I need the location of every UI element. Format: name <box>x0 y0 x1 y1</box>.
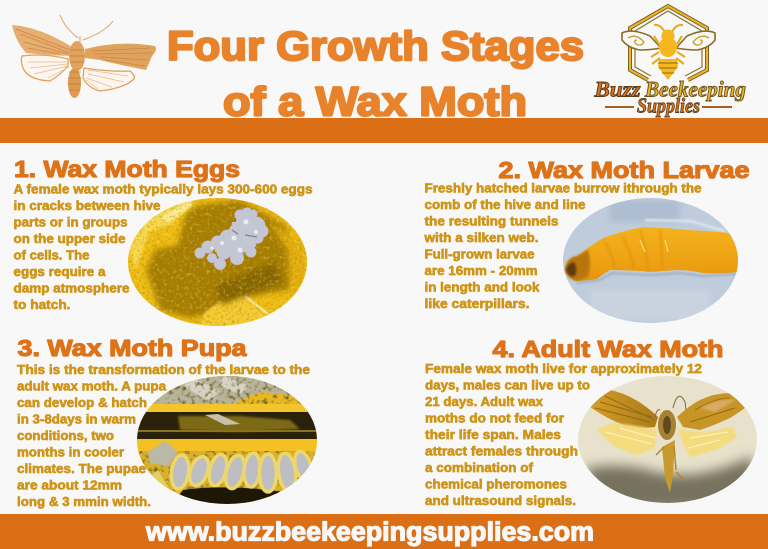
icon: sketched moth <box>12 15 156 98</box>
text block: of cells. The <box>14 248 90 262</box>
text block: on the upper side <box>14 232 126 246</box>
logo wordmark: Buzz <box>593 76 641 102</box>
photo: eggs on comb <box>128 198 308 330</box>
text block: adult wax moth. A pupa <box>17 380 167 394</box>
logo wordmark: Supplies <box>637 94 700 118</box>
icon: bee <box>622 25 715 80</box>
text block: in length and look <box>424 280 540 294</box>
text block: with a silken web. <box>423 231 538 245</box>
text block: chemical pheromones <box>425 478 567 492</box>
text block: 21 days. Adult wax <box>425 395 543 409</box>
text block: in cracks between hive <box>14 199 161 213</box>
text block: attract females through <box>425 444 578 458</box>
text block: their life span. Males <box>425 428 561 442</box>
text block: climates. The pupae <box>17 462 146 476</box>
text block <box>17 363 310 509</box>
photo: adult moth <box>578 376 758 510</box>
title: of a Wax Moth <box>223 78 527 124</box>
text block: the resulting tunnels <box>424 214 559 228</box>
text block: days, males can live up to <box>425 378 590 392</box>
heading: 2. Wax Moth Larvae <box>498 157 750 183</box>
title <box>167 23 584 124</box>
top band <box>0 118 768 143</box>
text block: like caterpillars. <box>424 297 530 311</box>
panel: 3. wax moth pupa <box>17 335 317 509</box>
title: Four Growth Stages <box>167 23 584 69</box>
pupae cells <box>169 450 314 492</box>
text block: Female wax moth live for approximately 12 <box>425 362 702 376</box>
heading: 1. Wax Moth Eggs <box>14 156 240 182</box>
text block: A female wax moth typically lays 300-600 eggs <box>14 182 313 196</box>
text block: in 3-8days in warm <box>17 412 136 426</box>
text block: This is the transformation of the larvae to the <box>17 363 310 377</box>
text block <box>423 182 702 311</box>
text block: are 16mm - 20mm <box>424 264 538 278</box>
eggs cluster <box>195 208 268 270</box>
text block: Freshly hatched larvae burrow ithrough the <box>424 182 702 196</box>
text block: comb of the hive and line <box>424 198 586 212</box>
photo: pupae in comb <box>137 376 317 506</box>
text block: Full-grown larvae <box>424 248 535 262</box>
text block: are about 12mm <box>17 478 122 492</box>
heading: 3. Wax Moth Pupa <box>18 335 248 361</box>
icon: hexagon frame <box>630 6 707 80</box>
text block: damp atmosphere <box>14 282 130 296</box>
footer url: www.buzzbeekeepingsupplies.com <box>145 518 594 546</box>
logo wordmark: Beekeeping <box>644 76 746 102</box>
text block: a combination of <box>425 461 534 475</box>
heading: 4. Adult Wax Moth <box>492 336 724 362</box>
panel: 2. wax moth larvae <box>423 157 750 324</box>
text block: moths do not feed for <box>425 412 564 426</box>
text block <box>425 362 702 508</box>
logo wordmark <box>593 76 746 118</box>
text block: to hatch. <box>14 298 70 312</box>
text block: and ultrasound signals. <box>425 494 576 508</box>
footer band <box>0 514 768 549</box>
text block: conditions, two <box>17 429 114 443</box>
text block: eggs require a <box>14 265 107 279</box>
text block: can develop & hatch <box>17 396 147 410</box>
text block: long & 3 mmin width. <box>17 495 151 509</box>
logo: Buzz Beekeeping Supplies <box>593 6 746 118</box>
text block: parts or in groups <box>14 216 128 230</box>
panel: 4. adult wax moth <box>425 336 758 510</box>
photo: larva <box>563 198 739 324</box>
panel: 1. wax moth eggs <box>14 156 313 330</box>
text block: months in cooler <box>17 446 124 460</box>
text block <box>14 182 313 312</box>
